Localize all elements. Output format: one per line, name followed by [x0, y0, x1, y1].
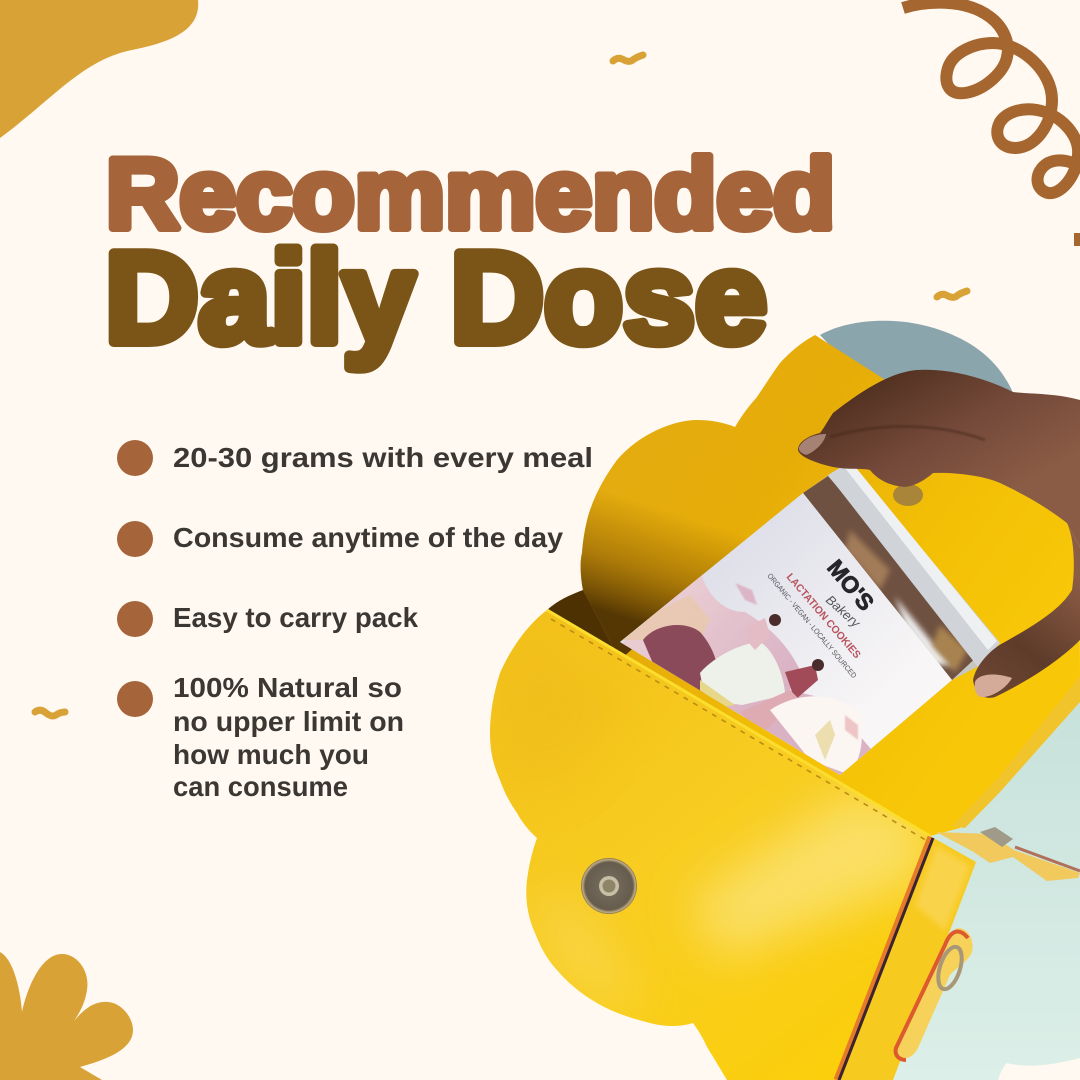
flap body — [480, 600, 940, 1080]
backdrop scallop: blue — [820, 321, 1014, 420]
flap top shading — [500, 640, 640, 790]
hand: finger shadow — [830, 426, 985, 440]
bullet 4: how much you — [173, 739, 369, 770]
hand — [798, 370, 1080, 698]
photo: hand with jar in yellow bag — [480, 321, 1080, 1080]
bag interior flap — [581, 335, 1080, 836]
title — [105, 138, 835, 370]
hand: back and fingers — [798, 370, 1080, 547]
zipper pull tab — [936, 832, 1080, 881]
side panel highlight — [915, 846, 970, 930]
interior shadow — [581, 440, 810, 660]
backdrop scallop: mint — [880, 680, 1080, 1080]
bullet 3 — [117, 601, 418, 637]
bullet 4: no upper limit on — [173, 706, 404, 737]
bag dark back lobe — [547, 590, 640, 660]
label brand: MO'S: MO'S — [822, 555, 879, 616]
bullet 1: 20-30 grams with every meal — [173, 442, 593, 473]
hand: thumb — [973, 523, 1080, 698]
label illustration — [622, 576, 871, 775]
strap piping — [896, 932, 968, 1060]
gold ring — [893, 484, 923, 506]
metal ring — [934, 944, 966, 992]
zipper piping — [837, 837, 933, 1080]
flap edge highlight — [547, 610, 930, 836]
snap button — [581, 858, 637, 914]
bullet 4: 100% Natural so — [173, 672, 402, 703]
strap loop — [896, 928, 973, 1058]
bag front flap — [480, 600, 940, 1080]
flap stitching — [551, 619, 929, 842]
jar — [615, 462, 1000, 780]
bullet 1 — [117, 440, 593, 476]
title line: Recommended: Recommended — [106, 138, 835, 249]
bag side panel — [836, 836, 976, 1080]
decorative blob: top left — [0, 0, 198, 138]
decorative spiral: top right — [903, 3, 1080, 193]
flap light band — [690, 790, 930, 960]
bullet 2: Consume anytime of the day — [173, 522, 563, 553]
fingernail — [799, 434, 826, 455]
thumbnail — [975, 675, 1012, 697]
bullet 4: can consume — [173, 771, 348, 802]
jar lid — [828, 462, 1000, 667]
jar label — [620, 493, 952, 775]
decorative flower: bottom left — [0, 952, 133, 1080]
bag inner lip — [952, 676, 1080, 828]
label product name: LACTATION COOKIES — [784, 571, 863, 661]
flap lower lobe light — [530, 890, 640, 1020]
jar base — [620, 462, 1000, 775]
zipper metal — [980, 827, 1013, 847]
bullet list — [117, 440, 593, 802]
label tagline: ORGANIC - VEGAN - LOCALLY SOURCED — [765, 572, 859, 680]
decorative squiggle: right — [937, 291, 967, 297]
bullet 4 — [117, 672, 404, 802]
decorative squiggle: top — [613, 55, 643, 61]
decorative mark: right edge — [1074, 233, 1080, 246]
decorative squiggle: left — [35, 710, 65, 716]
label script: Bakery: Bakery — [823, 592, 864, 631]
tab edge — [1015, 847, 1080, 871]
bullet 3: Easy to carry pack — [173, 602, 418, 633]
jar cookies — [803, 476, 980, 680]
title line: Daily Dose: Daily Dose — [105, 226, 767, 370]
